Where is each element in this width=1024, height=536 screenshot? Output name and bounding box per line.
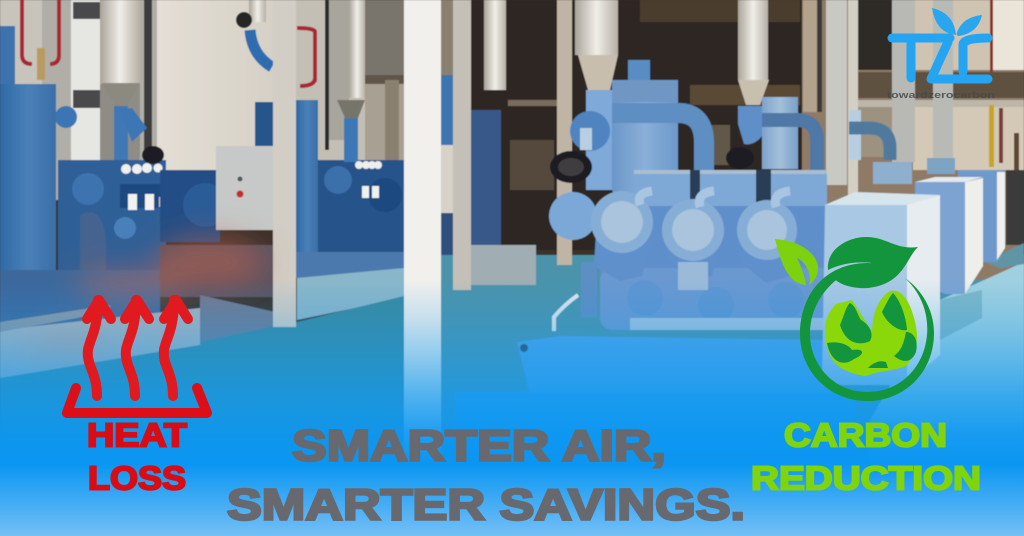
label: heat loss: HEAT	[87, 416, 187, 454]
title: SMARTER AIR,	[292, 422, 666, 470]
icon: carbon reduction globe	[775, 237, 934, 401]
tray	[67, 388, 207, 413]
logo: TZC	[887, 8, 995, 100]
label: heat loss	[87, 416, 187, 496]
far compressor units	[849, 110, 955, 184]
right background with steel columns	[802, 0, 1024, 280]
label: carbon reduction: CARBON	[784, 416, 947, 454]
machine base	[455, 336, 855, 452]
left tanks and compressor	[0, 0, 275, 330]
arrow 1	[87, 300, 111, 396]
red pipes	[22, 0, 476, 120]
near cabinet	[905, 195, 940, 385]
arrow 2	[125, 300, 149, 396]
left wall and window	[0, 0, 404, 200]
title: SMARTER SAVINGS.	[227, 480, 745, 530]
main compressor	[549, 0, 835, 331]
logo letters	[892, 38, 988, 79]
icon: heat loss	[67, 300, 207, 413]
far cabinet	[958, 170, 1005, 262]
floor	[0, 296, 404, 536]
heat haze	[25, 236, 265, 357]
concrete columns	[273, 0, 471, 536]
background industrial bay	[471, 0, 806, 285]
arrow 3	[164, 300, 188, 396]
title	[227, 422, 745, 530]
second compressor bay	[296, 0, 404, 320]
ring	[800, 263, 934, 401]
label: carbon reduction	[751, 416, 981, 496]
middle cabinet	[915, 182, 965, 294]
light leaf	[775, 239, 818, 285]
blue elbow pipe and valve	[236, 0, 272, 67]
label: carbon reduction: REDUCTION	[751, 460, 981, 496]
dark leaf	[828, 237, 918, 288]
right floor and plinths	[870, 243, 1024, 536]
logo leaves	[932, 8, 982, 36]
logo tagline: towardzerocarbon	[887, 90, 995, 100]
globe	[825, 291, 917, 376]
cooler cabinets	[822, 170, 1005, 385]
globe land	[827, 293, 917, 368]
grey electrical box	[216, 102, 274, 230]
label: heat loss: LOSS	[88, 460, 186, 496]
blue gradient overlay	[0, 280, 1024, 536]
